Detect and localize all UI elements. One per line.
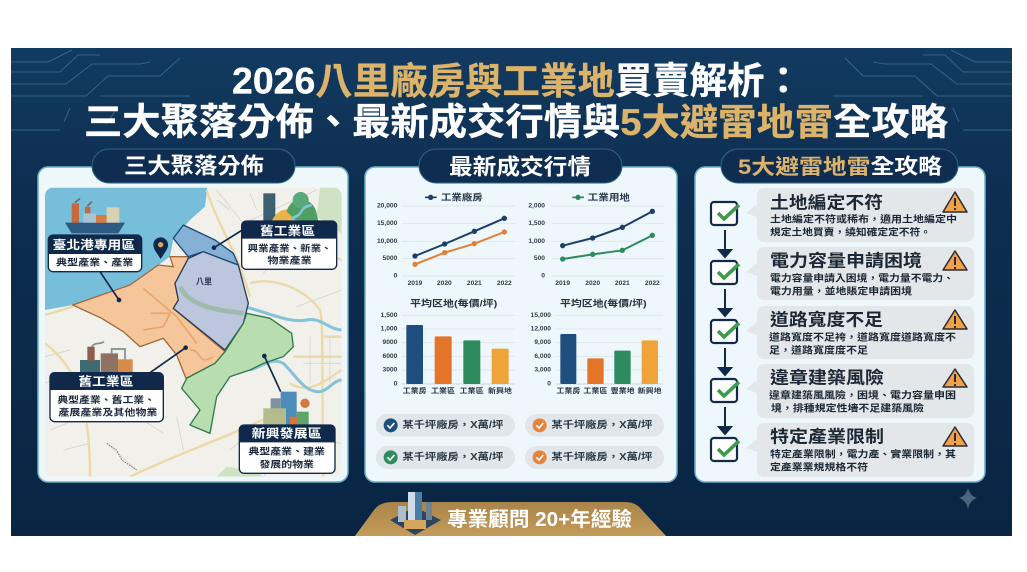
section heading: transactions: 最新成交行情 <box>449 154 591 180</box>
callout: port zone <box>48 235 142 272</box>
bar chart: right average: 工業房 <box>556 386 580 395</box>
bar chart: right average: 平均区地(每價/坪) <box>560 297 647 308</box>
line chart: factories <box>377 191 515 287</box>
line chart: industrial land: 2,000 <box>528 202 545 209</box>
pitfall 5: 定產業業規規格不符 <box>770 460 868 474</box>
callout: north old industrial zone <box>242 221 337 269</box>
transaction pills <box>376 414 664 469</box>
pitfall 2 <box>711 247 974 300</box>
pitfall 3 <box>711 306 974 359</box>
callout: south old industrial zone: 舊工業區 <box>78 374 133 389</box>
location pin <box>153 237 168 259</box>
line chart: industrial land: 1,500 <box>528 220 545 227</box>
pitfall 5 <box>711 423 974 477</box>
bar chart: left average: 9000 <box>383 339 398 346</box>
callout: north old industrial zone: 舊工業區 <box>260 223 315 238</box>
line chart: factories: 2020 <box>437 280 452 287</box>
line chart: industrial land: 500 <box>534 255 545 262</box>
icon: new development buildings <box>263 392 310 425</box>
callout: new development zone: 新興發展區 <box>252 425 322 440</box>
pitfall 5: 特定產業限制，電力產、實業限制，其 <box>770 448 956 460</box>
section heading: pitfalls <box>721 149 958 183</box>
pitfall 3: 足，道路寬度度不足 <box>769 344 868 356</box>
pitfall 4: 境，排種規定性墻不足建築風險 <box>771 402 924 414</box>
region: port blue <box>173 225 238 265</box>
line chart: industrial land: 1,000 <box>528 238 545 245</box>
bar chart: left average: 工業區 <box>431 386 455 395</box>
arrow 3 <box>719 348 731 375</box>
icon: tower block <box>390 492 441 535</box>
line chart: industrial land: 工業用地 <box>588 191 631 202</box>
section heading: transactions <box>419 149 622 183</box>
region: orange <box>73 257 225 378</box>
region: green <box>182 313 293 433</box>
pitfall 2: 電力容量申請入困境，電力量不電力、 <box>770 272 954 284</box>
bar chart: right average: 15,000 <box>531 312 551 319</box>
icon: port ship <box>65 198 125 233</box>
pitfall 1: 土地編定不符 <box>770 192 883 212</box>
icon: old factory <box>80 342 133 373</box>
pitfall 4 <box>711 364 974 418</box>
map: 八里 <box>196 277 212 286</box>
bar chart: left average: 工業房 <box>403 386 427 395</box>
section heading: clusters: 三大聚落分佈 <box>124 154 264 178</box>
pitfall 1 <box>711 188 974 242</box>
line chart: industrial land <box>528 191 664 287</box>
section heading: pitfalls: 5大避雷地雷 全攻略 <box>738 156 942 178</box>
icon: sparkle <box>959 488 977 509</box>
icon: industrial and landscape <box>263 192 318 221</box>
line chart: factories: 2019 <box>408 280 423 287</box>
section heading: clusters <box>92 149 295 183</box>
line chart: industrial land: 2022 <box>645 280 660 287</box>
title <box>84 60 948 142</box>
line chart: factories: 2022 <box>497 280 512 287</box>
line chart: industrial land: 2020 <box>585 280 600 287</box>
bar chart: right average: 12,000 <box>531 325 551 332</box>
bar chart: left average: 6000 <box>383 353 398 360</box>
map <box>45 188 342 477</box>
bar chart: left average: 3000 <box>383 366 398 373</box>
bar chart: right average: 豐業地 <box>611 386 635 395</box>
pitfall 5: 特定產業限制 <box>770 426 884 446</box>
bar chart: right average: 6,000 <box>534 353 551 360</box>
line chart: factories: 2021 <box>467 280 482 287</box>
bar chart: left average: 1,000 <box>381 325 398 332</box>
panel: latest transactions <box>365 149 677 482</box>
line chart: factories: 5000 <box>383 255 398 262</box>
region: Bali blue-grey <box>173 252 248 350</box>
pitfall 2: 電力容量申請困境 <box>770 250 922 270</box>
transaction pills: 某千坪廠房，X萬/坪 <box>402 419 504 431</box>
bar chart: right average: 0 <box>547 380 551 387</box>
pitfall 3: 道路寬度不足袴，道路寬度道路寬度不 <box>769 330 956 344</box>
experience banner <box>355 492 666 536</box>
line chart: factories: 0 <box>394 272 398 279</box>
pitfall 4: 違章建築風險 <box>770 368 884 388</box>
transaction pills: 某千坪廠房，X萬/坪 <box>402 451 504 463</box>
bar chart: right average: 工業區 <box>583 386 607 395</box>
bar chart: right average: 3,000 <box>534 366 551 373</box>
callout: port zone: 臺北港專用區 <box>53 237 135 252</box>
bar chart: left average: 1,500 <box>381 312 398 319</box>
title: 三大聚落分佈、最新成交行情與 5大避雷地雷全攻略 <box>84 102 948 142</box>
callout: south old industrial zone: 產展產業及其他物業 <box>58 406 157 417</box>
bar chart: left average: 0 <box>394 380 398 387</box>
line chart: industrial land: 2021 <box>615 280 630 287</box>
bar chart: right average: 新興地 <box>638 386 662 395</box>
bar chart: right average <box>531 297 663 395</box>
bar chart: left average: 新興地 <box>488 386 512 395</box>
pitfall 2: 電力用量，並地賬定申請困境 <box>770 284 912 298</box>
transaction pills: 某千坪廠房，X萬/坪 <box>551 419 653 431</box>
callout: south old industrial zone: 典型產業、舊工業、 <box>57 394 155 405</box>
line chart: factories: 15,000 <box>377 220 398 227</box>
pitfall 1: 規定土地買賣，繞知確定定不符。 <box>770 226 931 238</box>
callout: new development zone: 典型產業、建業 <box>248 446 325 457</box>
pitfall 1: 土地編定不符或稀布，適用土地編定中 <box>770 212 957 226</box>
panel: cluster map <box>38 149 348 482</box>
bar chart: right average: 9,000 <box>534 339 551 346</box>
callout: north old industrial zone: 興業產業、新業、 <box>248 242 332 253</box>
callout: port zone: 典型產業、產業 <box>56 257 133 268</box>
bar chart: left average <box>381 297 515 395</box>
line chart: factories: 10,000 <box>377 238 398 245</box>
pitfall 4: 違章建築風風險，困境、電力容量申困 <box>769 388 956 402</box>
line chart: factories: 20,000 <box>377 202 398 209</box>
bar chart: left average: 工業區 <box>460 386 484 395</box>
arrow 2 <box>719 289 731 316</box>
line chart: factories: 工業廠房 <box>441 191 483 202</box>
arrow 1 <box>719 230 731 257</box>
callout: north old industrial zone: 物業產業 <box>267 255 312 266</box>
panel: five pitfalls <box>695 149 985 482</box>
pitfall 3: 道路寬度不足 <box>770 310 883 330</box>
experience banner: 專業顧問 20+年經驗 <box>447 507 632 531</box>
callout: south old industrial zone <box>50 373 163 422</box>
title: 2026八里廠房與工業地買賣解析： <box>232 60 802 102</box>
arrow 4 <box>719 407 731 434</box>
transaction pills: 某千坪廠房，X萬/坪 <box>551 451 653 463</box>
line chart: industrial land: 2019 <box>555 280 570 287</box>
callout: new development zone: 發展的物業 <box>259 458 314 469</box>
callout: new development zone <box>239 425 335 473</box>
line chart: industrial land: 0 <box>541 272 545 279</box>
bar chart: left average: 平均区地(每價/坪) <box>410 297 497 308</box>
